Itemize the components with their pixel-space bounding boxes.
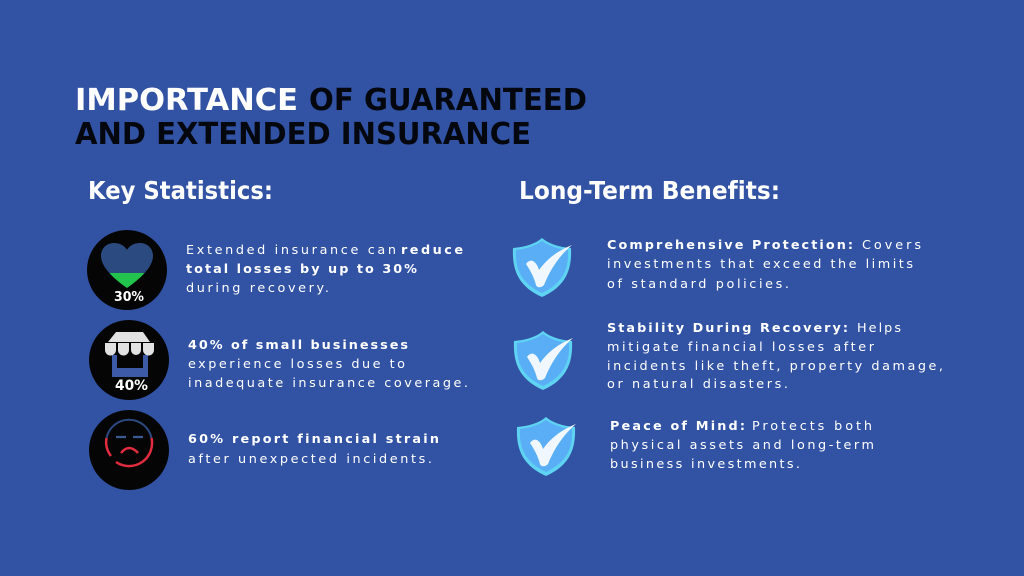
benefit text: comprehensive protection: of standard policies.: [607, 277, 789, 292]
icon: sad face: [89, 410, 169, 490]
benefit text: comprehensive protection: Covers: [862, 238, 921, 253]
stat text: small businesses: experience losses due to: [188, 357, 405, 372]
stat text: reduce losses: Extended insurance can: [186, 243, 396, 258]
icon: storefront 40%: [89, 320, 169, 400]
heading: key statistics: Key Statistics:: [88, 176, 273, 205]
benefit text: stability during recovery: Helps: [857, 321, 901, 336]
icon: heart 30%: 30%: [114, 289, 144, 305]
benefit text: stability during recovery: [607, 321, 943, 392]
stat text: financial strain: [188, 432, 439, 467]
stat text: small businesses: 40% of small businesses: [188, 338, 408, 353]
stat text: financial strain: 60% report financial strain: [188, 432, 439, 447]
benefit text: stability during recovery: incidents like theft, property damage,: [607, 359, 943, 374]
benefit text: comprehensive protection: Comprehensive Protection:: [607, 238, 853, 253]
stat text: small businesses: inadequate insurance coverage.: [188, 376, 468, 391]
stat text: reduce losses: [186, 243, 463, 296]
benefit text: peace of mind: Peace of Mind:: [610, 419, 745, 434]
benefit text: comprehensive protection: [607, 238, 921, 292]
heading: long-term benefits: Long-Term Benefits:: [519, 176, 780, 205]
stat text: small businesses: [188, 338, 468, 391]
icon: storefront 40%: 40%: [115, 378, 148, 394]
stat text: financial strain: after unexpected incidents.: [188, 452, 432, 467]
title: [75, 83, 587, 152]
title: AND EXTENDED INSURANCE: [75, 117, 531, 152]
benefit text: peace of mind: [610, 419, 874, 472]
benefit text: peace of mind: business investments.: [610, 457, 800, 472]
icon: heart 30%: [87, 230, 167, 310]
benefit text: peace of mind: physical assets and long-term: [610, 438, 874, 453]
benefit text: peace of mind: Protects both: [752, 419, 872, 434]
benefit text: stability during recovery: mitigate financial losses after: [607, 340, 875, 355]
benefit text: stability during recovery: or natural disasters.: [607, 377, 788, 392]
title: OF GUARANTEED: [309, 83, 587, 118]
benefit text: comprehensive protection: investments that exceed the limits: [607, 257, 913, 272]
stat text: reduce losses: total losses by up to 30%: [186, 262, 417, 277]
icon: shield check 3: [517, 417, 576, 476]
benefit text: stability during recovery: Stability During Recovery:: [607, 321, 848, 336]
title: IMPORTANCE: [75, 83, 298, 118]
stat text: reduce losses: reduce: [401, 243, 463, 258]
icon: shield check 1: [513, 238, 572, 297]
icon: shield check 2: [514, 331, 573, 390]
stat text: reduce losses: during recovery.: [186, 281, 329, 296]
